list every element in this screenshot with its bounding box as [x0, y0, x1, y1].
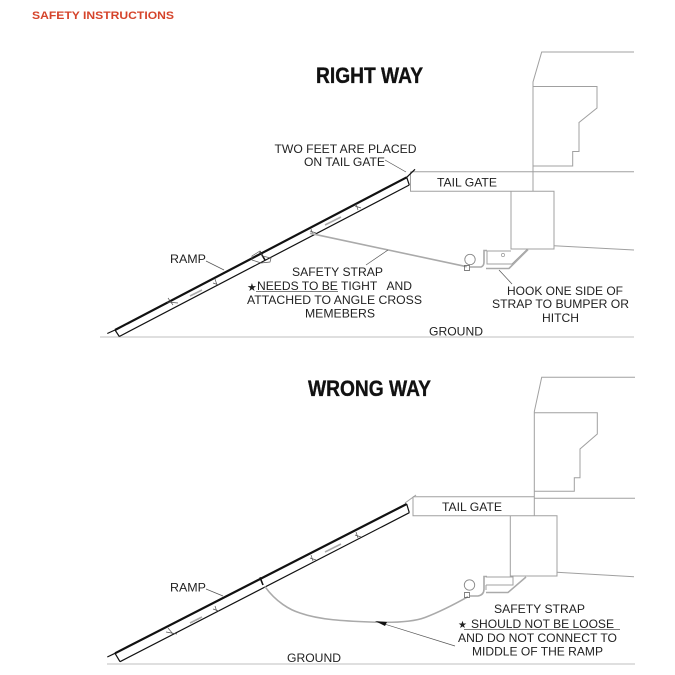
- heading: wrong way: WRONG WAY: [308, 376, 431, 401]
- hitch: [470, 576, 526, 596]
- safety strap: [310, 233, 475, 270]
- label: safety strap wrong: SHOULD NOT BE LOOSE: [471, 617, 614, 631]
- heading: right way: RIGHT WAY: [316, 63, 423, 88]
- label: safety strap right: NEEDS TO BE TIGHT AND: [257, 279, 412, 293]
- label: two feet placed: [274, 142, 417, 172]
- truck body outline: [405, 377, 635, 577]
- label: ramp: RAMP: [170, 252, 206, 266]
- label: safety strap right: MEMEBERS: [305, 306, 375, 320]
- label: hook: STRAP TO BUMPER OR: [492, 297, 629, 311]
- label: ramp: [170, 580, 223, 596]
- label: ramp: RAMP: [170, 580, 206, 594]
- page heading: SAFETY INSTRUCTIONS: [32, 10, 174, 22]
- label: ramp: [170, 252, 224, 270]
- panel: right way: [100, 52, 634, 338]
- ground line: [107, 663, 635, 665]
- label: safety strap right: [247, 250, 422, 320]
- hitch: [470, 250, 528, 268]
- label: ground wrong: GROUND: [287, 651, 341, 665]
- label: safety strap wrong: ★: [458, 620, 467, 631]
- label: safety strap wrong: MIDDLE OF THE RAMP: [472, 644, 603, 658]
- label: safety strap right: ★: [247, 282, 257, 294]
- label: safety strap wrong: AND DO NOT CONNECT TO: [458, 631, 617, 645]
- truck body outline: [410, 52, 634, 250]
- label: safety strap wrong: SAFETY STRAP: [494, 602, 585, 616]
- label: hook: HOOK ONE SIDE OF: [507, 284, 623, 298]
- label: safety strap wrong: [458, 602, 620, 658]
- ramp: [107, 504, 409, 662]
- label: safety strap right: SAFETY STRAP: [292, 265, 383, 279]
- ramp: [107, 169, 415, 336]
- arrow to loose strap: [375, 621, 455, 646]
- safety strap loose: [265, 580, 475, 622]
- label: safety strap right: ATTACHED TO ANGLE CROSS: [247, 293, 422, 307]
- label: two feet placed: TWO FEET ARE PLACED: [274, 142, 417, 156]
- label: tail gate: TAIL GATE: [442, 500, 502, 514]
- label: tail gate: TAIL GATE: [437, 176, 497, 190]
- label: two feet placed: ON TAIL GATE: [304, 155, 385, 169]
- label: hook: [492, 270, 629, 325]
- ground line: [100, 336, 634, 338]
- panel: wrong way: [107, 376, 635, 665]
- label: ground right: GROUND: [429, 324, 483, 338]
- label: hook: HITCH: [542, 311, 579, 325]
